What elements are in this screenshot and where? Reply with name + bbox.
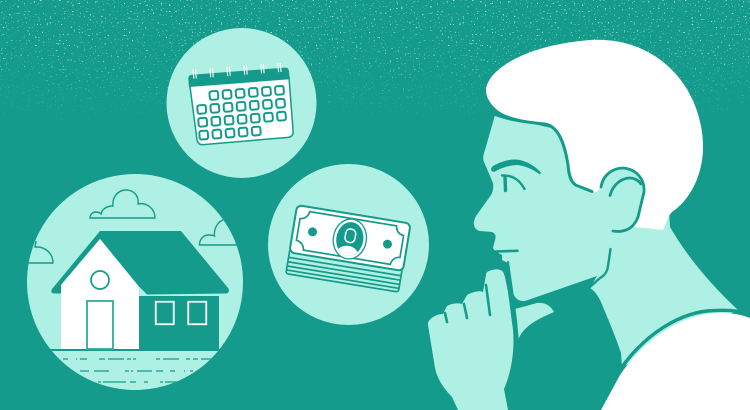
note stack (286, 248, 403, 292)
ground (50, 349, 220, 351)
roof (51, 231, 229, 294)
panel: house circle (20, 174, 248, 390)
facial lines (495, 114, 644, 287)
finger lines (445, 262, 518, 342)
note dots (307, 227, 393, 249)
face and neck (474, 115, 738, 367)
portrait (332, 218, 368, 260)
figure: thinking man (428, 40, 750, 410)
note frame (295, 210, 405, 266)
panel: money circle (268, 164, 429, 325)
door (87, 301, 113, 349)
panel: calendar circle (166, 28, 316, 178)
top note (289, 205, 411, 271)
hand (428, 269, 513, 410)
speckle texture (0, 0, 750, 125)
ear (590, 168, 644, 231)
icon: stack of banknotes (286, 205, 411, 292)
icon: clouds (20, 190, 248, 263)
house front wall (61, 239, 139, 349)
ground dashes (63, 359, 213, 382)
eyebrow (491, 160, 541, 174)
hair (486, 40, 703, 230)
house body right (139, 296, 219, 350)
windows (156, 302, 206, 324)
icon: calendar (188, 62, 294, 145)
round window (91, 271, 109, 289)
thumb (515, 303, 554, 341)
shoulder shirt (601, 313, 750, 410)
shoulder outline (622, 310, 739, 367)
